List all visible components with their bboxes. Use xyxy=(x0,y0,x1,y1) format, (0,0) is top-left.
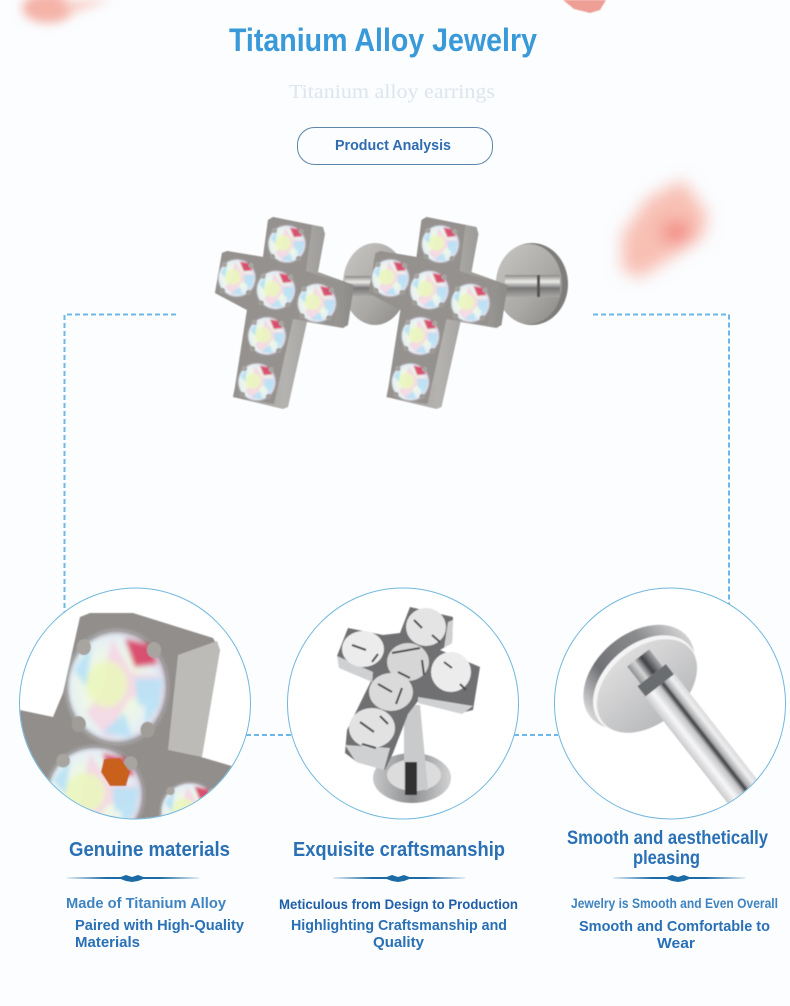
body text xyxy=(279,896,518,951)
disc highlight edge xyxy=(592,634,694,728)
heading xyxy=(567,828,768,869)
column: genuine materials xyxy=(66,839,245,951)
back disc xyxy=(373,753,451,803)
button: Product Analysis: Product Analysis xyxy=(335,137,451,154)
left earring back disc xyxy=(343,243,407,325)
ornament divider xyxy=(67,875,199,882)
decorative petal: top centre xyxy=(563,0,606,13)
body text: Highlighting Craftsmanship and xyxy=(291,917,507,934)
decorative petal: right xyxy=(622,180,708,278)
decorative petal: top left xyxy=(22,0,112,23)
post xyxy=(404,705,428,790)
ornament divider xyxy=(613,875,745,882)
left cross xyxy=(215,217,354,409)
subtitle: Titanium alloy earrings xyxy=(289,81,495,103)
dashed connector lines xyxy=(64,314,729,735)
disc face xyxy=(596,639,698,734)
body text xyxy=(571,896,778,952)
heading: Smooth and aesthetically xyxy=(567,828,768,849)
body text: Meticulous from Design to Production xyxy=(279,896,518,912)
button: Product Analysis xyxy=(298,128,492,164)
body text: Paired with High-Quality xyxy=(75,917,245,934)
body text: Wear xyxy=(657,935,695,952)
ornament divider xyxy=(333,875,465,882)
disc back rim xyxy=(583,624,694,728)
cross body xyxy=(337,607,480,770)
body text: Smooth and Comfortable to xyxy=(579,918,770,935)
rod xyxy=(627,649,757,803)
product photo: pair of cross earrings xyxy=(215,217,568,409)
circle: genuine materials close-up xyxy=(19,588,251,820)
body text: Quality xyxy=(373,934,425,951)
title: Titanium Alloy Jewelry xyxy=(229,22,537,58)
column: smooth and aesthetically pleasing xyxy=(567,828,778,952)
circle: craftsmanship cross xyxy=(288,588,518,819)
right earring back disc xyxy=(496,243,568,325)
heading: Exquisite craftsmanship xyxy=(293,839,505,861)
circle: smooth post and disc xyxy=(554,588,786,831)
body text: Made of Titanium Alloy xyxy=(66,895,227,912)
heading: Genuine materials xyxy=(69,839,230,861)
heading: pleasing xyxy=(633,848,700,869)
right cross xyxy=(368,217,508,409)
column: exquisite craftsmanship xyxy=(279,839,518,951)
body text xyxy=(66,895,245,951)
body text: Materials xyxy=(75,934,140,951)
